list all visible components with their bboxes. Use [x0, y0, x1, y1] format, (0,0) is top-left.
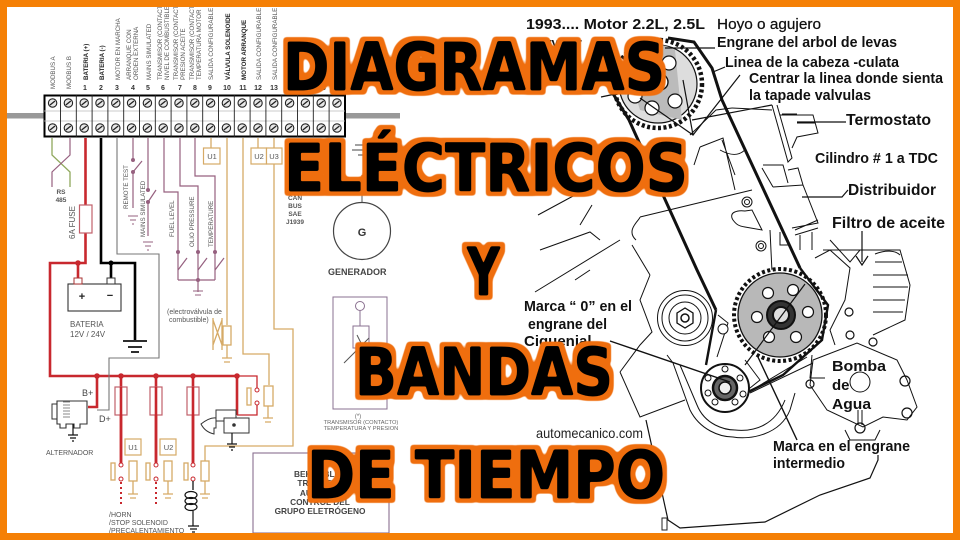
starter motor [201, 410, 249, 450]
engine callouts: Hoyo o agujero [717, 16, 821, 33]
engine callouts: Agua [832, 396, 872, 413]
controller box: TRANSFER [297, 478, 343, 488]
CAN bus label: SAE [288, 211, 302, 218]
engine callouts: automecanico.com [536, 425, 643, 441]
crankshaft gear [610, 341, 797, 440]
terminal labels: 2 [99, 85, 103, 92]
controller box [253, 453, 389, 533]
engine callouts: la tapade valvulas [749, 87, 871, 104]
controller box: CONTROL DEL [290, 497, 350, 507]
terminal labels: 16 [318, 85, 326, 92]
engine callouts: Centrar la linea donde sienta [749, 70, 944, 87]
controller box: GRUPO ELETRÓGENO [275, 505, 366, 516]
controller box: BEK3 - BLUE [294, 469, 347, 479]
lower output labels: /STOP SOLENOID [109, 520, 168, 527]
engine callouts: Marca “ 0” en el [524, 298, 632, 315]
glow plug coil [185, 481, 199, 532]
sensor inputs [164, 138, 224, 324]
terminal block [44, 95, 345, 137]
battery: 12V / 24V [70, 330, 106, 339]
CAN bus label: J1939 [286, 219, 304, 226]
terminal labels: 5 [146, 85, 150, 92]
panel: electrical wiring diagram [7, 0, 400, 535]
terminal labels: MOTOR ARRANQUE [241, 20, 248, 80]
terminal labels: MODBUS A [50, 55, 57, 89]
sender box: TRANSMISOR (CONTACTO) [324, 420, 398, 426]
terminal labels: SALIDA CONFIGURABLE [272, 8, 279, 80]
terminal labels: 8 [193, 85, 197, 92]
intermediate gear [734, 269, 826, 365]
output modules: U1 [207, 152, 217, 161]
terminal labels: TRANSMISOR (CONTACTO) [189, 0, 196, 80]
terminal labels: 12 [254, 85, 262, 92]
terminal labels: MODBUS B [66, 56, 73, 89]
remote test and mains switches [97, 138, 159, 410]
sender box: TEMPERATURA Y PRESION [324, 426, 398, 432]
battery: BATERIA [70, 320, 104, 329]
terminal labels: 4 [131, 85, 135, 92]
terminal labels: 13 [270, 85, 278, 92]
terminal labels: BATERIA (+) [83, 44, 90, 80]
generator: G [358, 227, 366, 239]
title line: DE TIEMPO: DE TIEMPO [307, 437, 665, 514]
red power wiring: 6A FUSE [68, 206, 77, 239]
panel: engine timing belt drawing [524, 16, 945, 530]
terminal labels: MAINS SIMULATED [146, 23, 153, 80]
terminal labels: 3 [115, 85, 119, 92]
lower output labels: /PRECALENTAMIENTO [109, 528, 185, 535]
engine callouts: Marca en el engrane [773, 438, 910, 455]
engine callouts: Distribuidor [848, 182, 936, 199]
timing belt [612, 38, 828, 392]
terminal labels: SALIDA CONFIGURABLE [256, 8, 263, 80]
engine callouts: Filtro de aceite [832, 215, 945, 232]
terminal labels: TEMPERATURA MOTOR [196, 9, 203, 80]
red power wiring [50, 138, 257, 465]
sender box [324, 297, 398, 432]
lower output labels [109, 512, 185, 535]
battery: − [107, 290, 113, 302]
engine callouts: Ciguenial [524, 333, 592, 350]
terminal labels: SALIDA CONFIGURABLE [208, 8, 215, 80]
idler pulley [658, 290, 728, 346]
terminal labels: 9 [208, 85, 212, 92]
engine callouts: Termostato [846, 112, 931, 129]
CAN bus label [286, 195, 304, 226]
engine callouts: de [832, 377, 850, 394]
terminal labels: 10 [223, 85, 231, 92]
title line: Y: Y [466, 234, 501, 311]
terminal labels: TRANSMISOR (CONTACTO) [157, 0, 164, 80]
alternator: D+ [99, 414, 111, 424]
title line: DIAGRAMAS: DIAGRAMAS [283, 29, 665, 106]
sender box: (*) [355, 414, 361, 420]
engine callouts: engrane del [528, 316, 607, 333]
alternator: B+ [82, 388, 93, 398]
title line: BANDAS: BANDAS [355, 334, 613, 411]
terminal labels: 11 [239, 85, 247, 92]
engine callouts: Cilindro # 1 a TDC [815, 150, 938, 167]
output modules: U3 [269, 152, 279, 161]
engine callouts: Engrane del arbol de levas [717, 34, 897, 51]
output modules: U2 [164, 443, 173, 452]
RS485 wires: 485 [56, 197, 67, 204]
engine callouts: intermedio [773, 455, 845, 472]
terminal labels: BATERIA (-) [99, 45, 106, 80]
sensor inputs: OLIO PRESSURE [189, 196, 196, 247]
terminal labels: ARRANQUE CON [126, 29, 133, 80]
sensor inputs: combustible) [169, 317, 209, 324]
CAN bus label: CAN [288, 195, 302, 202]
controller box: AUTOM. Y [300, 488, 341, 498]
battery: + [79, 291, 85, 303]
output modules: U2 [254, 152, 264, 161]
battery [68, 138, 147, 352]
output modules: U1 [128, 443, 138, 452]
lower output labels: /HORN [109, 512, 132, 519]
RS485 wires [52, 138, 70, 204]
terminal labels: VÁLVULA SOLENOIDE [225, 13, 232, 80]
title [283, 29, 688, 514]
remote test and mains switches: REMOTE TEST [123, 165, 130, 209]
camshaft gear [601, 40, 868, 265]
sensor inputs: FUEL LEVEL [169, 200, 176, 237]
engine callouts: Bomba [832, 358, 887, 375]
engine callouts: Chrysler [529, 35, 582, 50]
generator: GENERADOR [328, 267, 387, 277]
output modules [111, 138, 293, 506]
engine callouts: Linea de la cabeza -culata [725, 54, 900, 71]
sensor inputs: (electroválvula de [167, 309, 222, 316]
terminal labels: ORDEN EXTERNA [133, 26, 140, 80]
CAN bus label: BUS [288, 203, 303, 210]
terminal labels: NIVEL DE COMBUSTIBLE [164, 6, 171, 80]
terminal labels: MOTOR EN MARCHA [115, 17, 122, 80]
terminal labels: 1 [83, 85, 87, 92]
terminal labels: 6 [161, 85, 165, 92]
RS485 wires: RS [56, 189, 66, 196]
engine outline [535, 105, 917, 530]
terminal labels: PRESION ACEITE [180, 28, 187, 80]
terminal labels: TRANSMISOR (CONTACTO) [173, 0, 180, 80]
sensor inputs: TEMPERATURE [208, 201, 215, 247]
generator [328, 145, 390, 277]
remote test and mains switches: MAINS SIMULATED [140, 180, 147, 237]
title line: ELÉCTRICOS: ELÉCTRICOS [284, 129, 688, 207]
alternator: ALTERNADOR [46, 450, 93, 457]
engine callouts [524, 16, 945, 472]
engine callouts: 1993.... Motor 2.2L, 2.5L [526, 16, 705, 33]
terminal labels: 7 [178, 85, 182, 92]
terminal labels [50, 0, 326, 92]
alternator [46, 388, 111, 457]
